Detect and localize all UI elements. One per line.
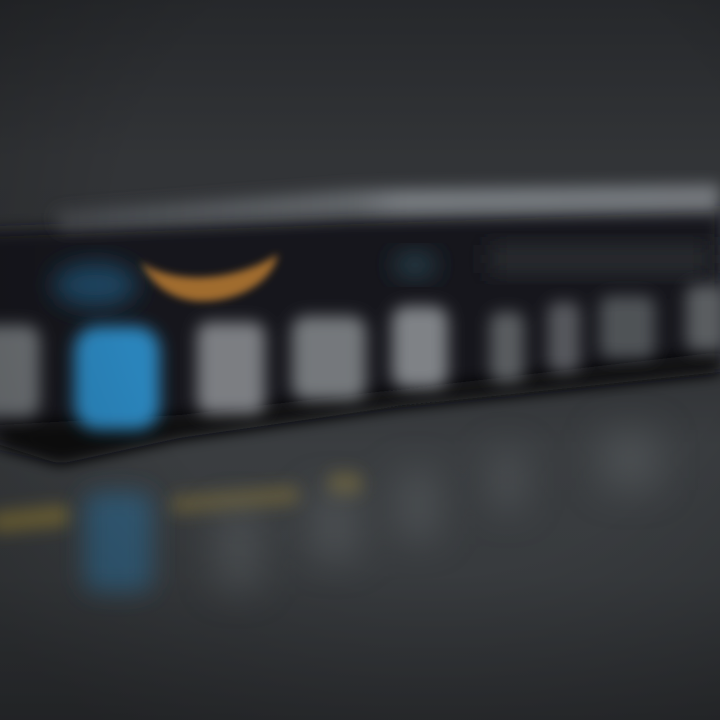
blue key bbox=[74, 326, 160, 430]
faint teal upper mark bbox=[393, 253, 437, 277]
strip front bottom shadow bbox=[0, 352, 720, 464]
amazon-like orange smile bbox=[140, 254, 278, 301]
grey keys bbox=[0, 285, 720, 417]
yellow reflections bbox=[0, 472, 362, 534]
blue reflection bbox=[84, 492, 152, 592]
grey reflections bbox=[215, 430, 660, 590]
strip body bbox=[0, 206, 720, 458]
faint upper key row bbox=[490, 245, 710, 273]
strip top edge highlight bbox=[55, 184, 720, 230]
blue upper glow bbox=[53, 263, 137, 307]
